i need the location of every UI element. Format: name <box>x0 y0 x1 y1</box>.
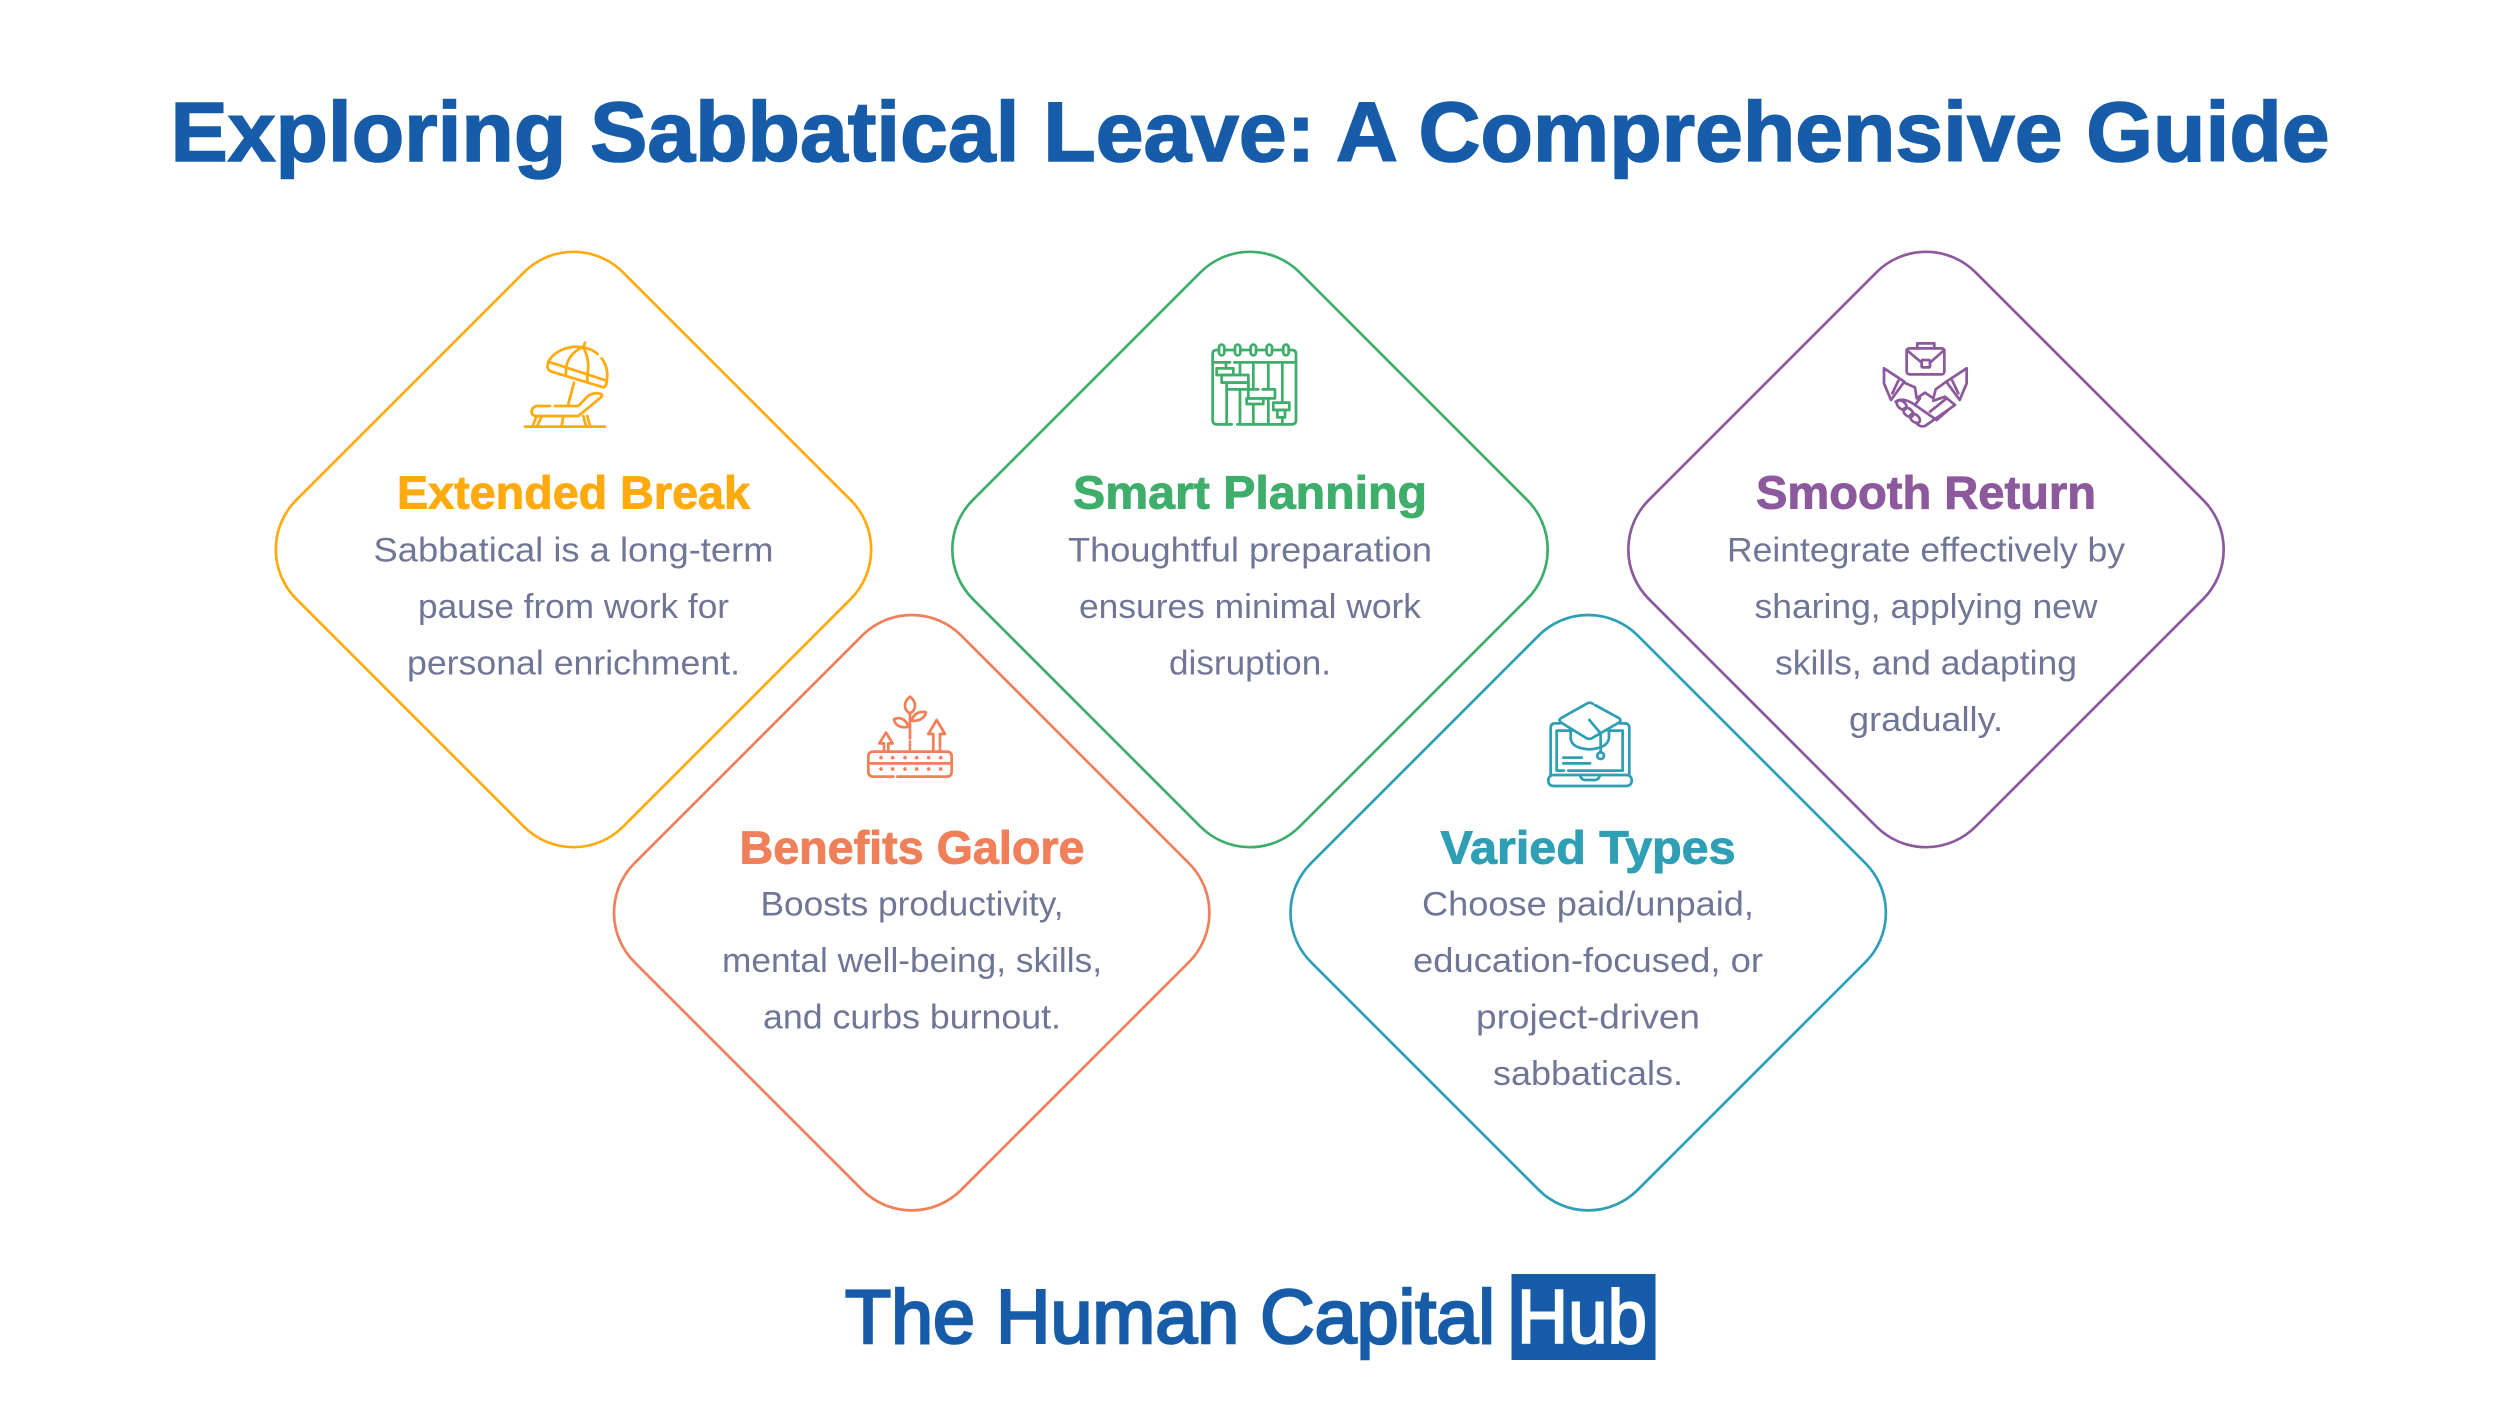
text: Smart Planning description: ensures minimal work <box>1079 588 1422 626</box>
text: Extended Break description: pause from work for <box>418 588 729 626</box>
text: Extended Break description <box>374 532 774 682</box>
panel: Varied Types <box>1262 586 1915 1239</box>
text: Varied Types description <box>1413 886 1763 1093</box>
text: Smooth Return description: skills, and adapting <box>1775 644 2077 682</box>
icon: gantt calendar <box>1213 345 1296 424</box>
text: Smart Planning description: Thoughtful preparation <box>1068 532 1432 570</box>
text: Smooth Return description: Reintegrate effectively by <box>1727 532 2125 570</box>
heading: Smart Planning: Smart Planning <box>1073 466 1427 518</box>
panel: Smooth Return <box>1599 223 2253 876</box>
panel: Smart Planning <box>923 223 1577 876</box>
text: Varied Types description: project-driven <box>1476 998 1700 1036</box>
logo wordmark: The Human Capital <box>845 1275 1495 1360</box>
logo badge <box>1512 1274 1656 1360</box>
text: Benefits Galore description: and curbs burnout. <box>763 998 1061 1036</box>
text: Smooth Return description: gradually. <box>1849 701 2003 739</box>
logo: The Human Capital Hub <box>845 1274 1656 1360</box>
text: Varied Types description: sabbaticals. <box>1493 1055 1683 1093</box>
text: Varied Types description: education-focused, or <box>1413 942 1763 980</box>
diamond outline: Benefits Galore <box>585 586 1238 1239</box>
logo badge text: Hub <box>1517 1275 1647 1360</box>
text: Smart Planning description <box>1068 532 1432 682</box>
heading: Benefits Galore: Benefits Galore <box>740 822 1084 874</box>
title: Exploring Sabbatical Leave: A Comprehensive Guide <box>170 85 2330 179</box>
text: Varied Types description: Choose paid/unpaid, <box>1422 886 1754 924</box>
text: Smooth Return description <box>1727 532 2125 739</box>
text: Extended Break description: Sabbatical is a long-term <box>374 532 774 570</box>
diamond outline: Smart Planning <box>923 223 1577 876</box>
icon: laptop with graduation cap <box>1548 703 1632 786</box>
icon: plant growth with arrows <box>868 697 952 777</box>
text: Benefits Galore description <box>722 886 1102 1036</box>
diamond outline: Smooth Return <box>1599 223 2253 876</box>
icon: beach umbrella and lounger <box>525 343 607 427</box>
text: Benefits Galore description: mental well-being, skills, <box>722 942 1102 980</box>
heading: Smooth Return: Smooth Return <box>1756 466 2096 518</box>
diamond outline: Extended Break <box>247 223 900 876</box>
icon: handshake with briefcase <box>1884 343 1967 426</box>
panel: Benefits Galore <box>585 586 1238 1239</box>
text: Benefits Galore description: Boosts productivity, <box>760 886 1064 924</box>
text: Smooth Return description: sharing, applying new <box>1754 588 2098 626</box>
panel: Extended Break <box>247 223 900 876</box>
heading: Varied Types: Varied Types <box>1440 822 1736 874</box>
text: Extended Break description: personal enrichment. <box>407 644 740 682</box>
diamond outline: Varied Types <box>1262 586 1915 1239</box>
heading: Extended Break: Extended Break <box>397 466 750 518</box>
text: Smart Planning description: disruption. <box>1169 644 1331 682</box>
